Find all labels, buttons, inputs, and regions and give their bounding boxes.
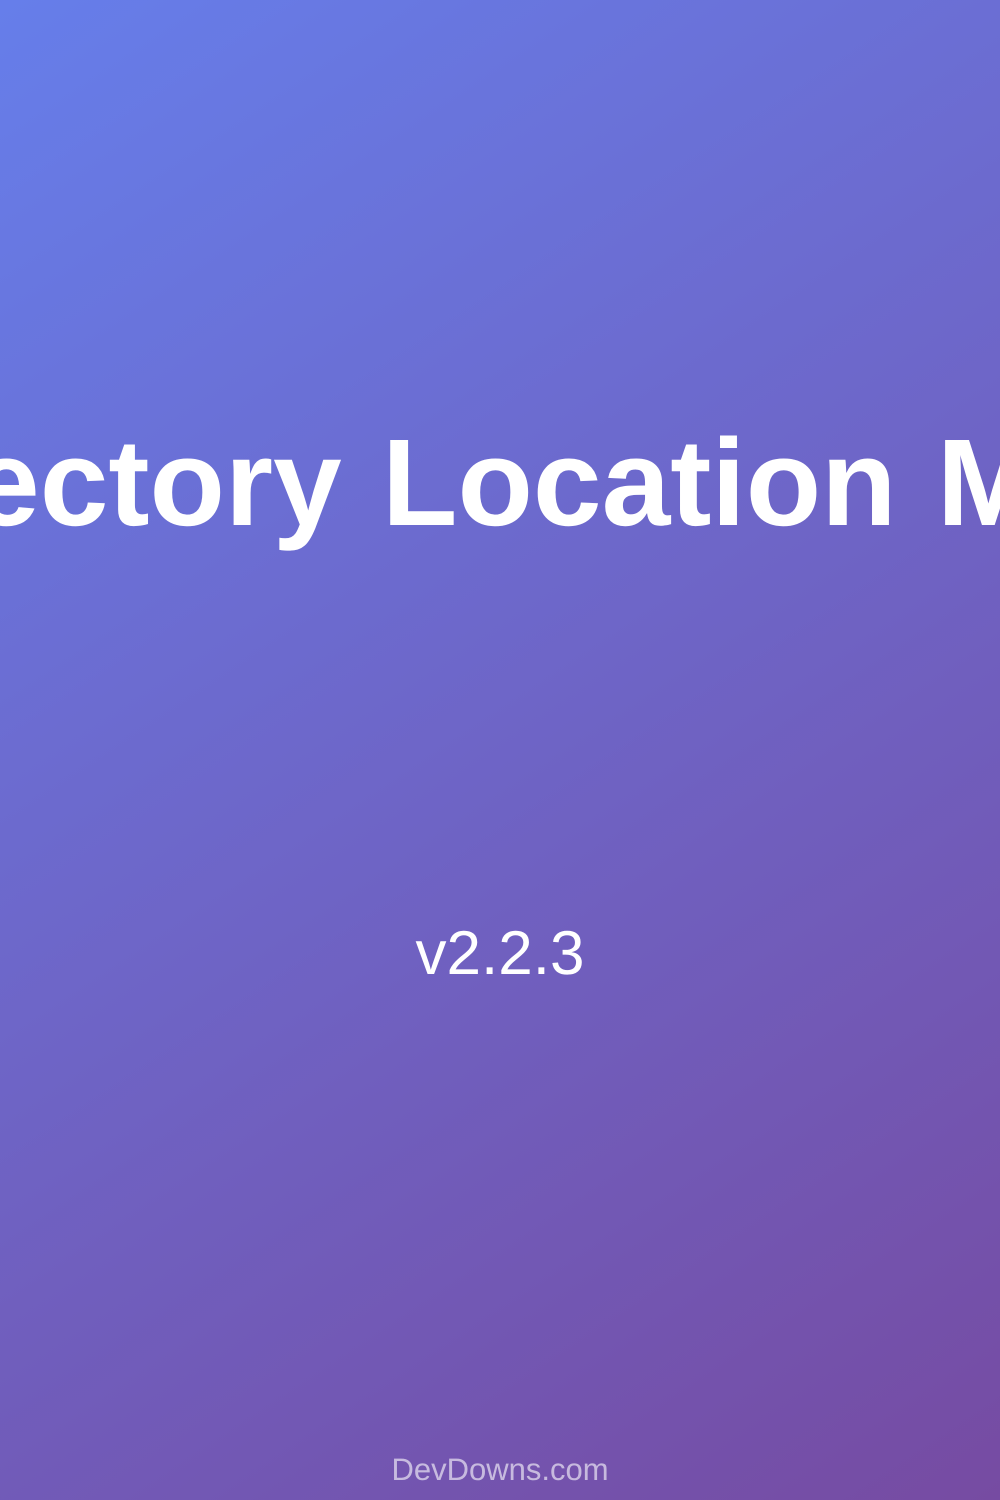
- version label: v2.2.3: [416, 919, 584, 988]
- footer: site name: DevDowns.com: [391, 1452, 609, 1487]
